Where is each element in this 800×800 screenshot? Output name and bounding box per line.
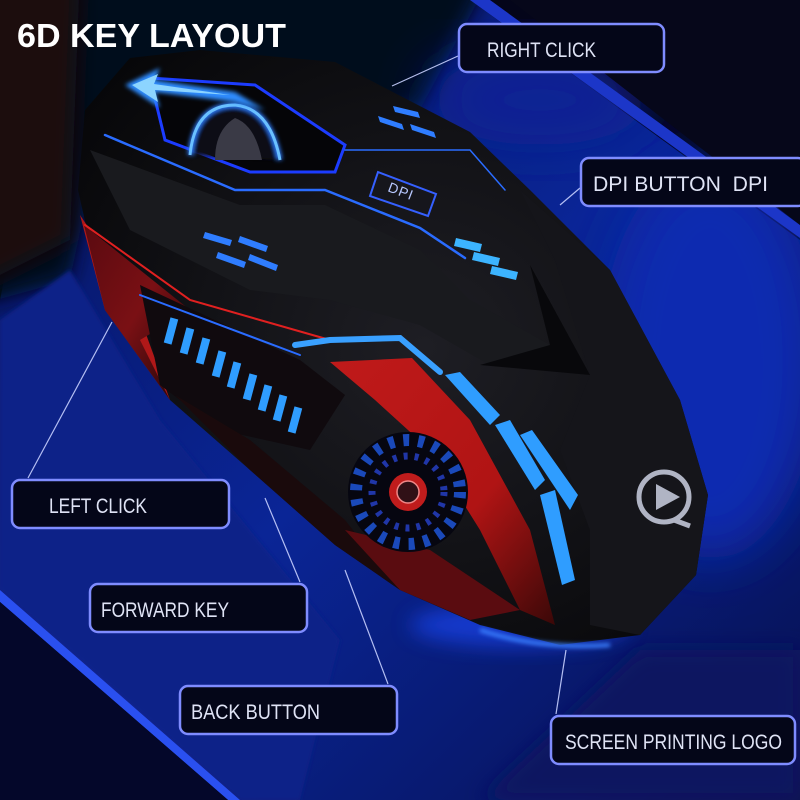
callout: forward key	[90, 584, 307, 632]
red highlight ridge	[330, 358, 555, 625]
right light slits	[454, 238, 518, 280]
callout: DPI button	[581, 158, 800, 206]
DPI button	[370, 172, 436, 216]
side vent lights	[164, 317, 302, 434]
callout: DPI button: DPI BUTTON DPI	[593, 173, 768, 196]
glowing arrow	[125, 68, 265, 110]
bottom glow edge	[480, 630, 610, 646]
left-button light slits	[203, 106, 436, 271]
title: 6D KEY LAYOUT	[17, 17, 286, 54]
mouse body	[78, 50, 708, 645]
wheel well	[150, 78, 345, 172]
right shell	[520, 190, 708, 635]
red lower flank	[80, 215, 170, 400]
callout: right click	[459, 24, 664, 72]
panel shadow under mouse	[410, 603, 630, 647]
lower dark flank with red reflection	[175, 395, 400, 590]
callout: left click: LEFT CLICK	[49, 495, 147, 518]
DPI button: DPI	[386, 179, 416, 203]
centre V	[480, 265, 590, 375]
lower red glow	[345, 530, 520, 620]
leader lines	[28, 56, 580, 714]
top shell panel	[90, 150, 590, 375]
callout: back button	[180, 686, 397, 734]
mouse illustration	[78, 50, 708, 646]
callout: right click: RIGHT CLICK	[487, 39, 596, 62]
side fan	[348, 432, 468, 552]
blue ridge lights	[445, 372, 578, 585]
callout: forward key: FORWARD KEY	[101, 599, 229, 622]
scroll wheel	[190, 105, 280, 160]
blue trim lines	[85, 135, 505, 372]
callout: left click	[12, 480, 229, 528]
callout: back button: BACK BUTTON	[191, 701, 320, 724]
screen printed logo	[639, 472, 690, 526]
callout: screen printing logo	[551, 716, 795, 764]
black side grip	[140, 285, 345, 450]
